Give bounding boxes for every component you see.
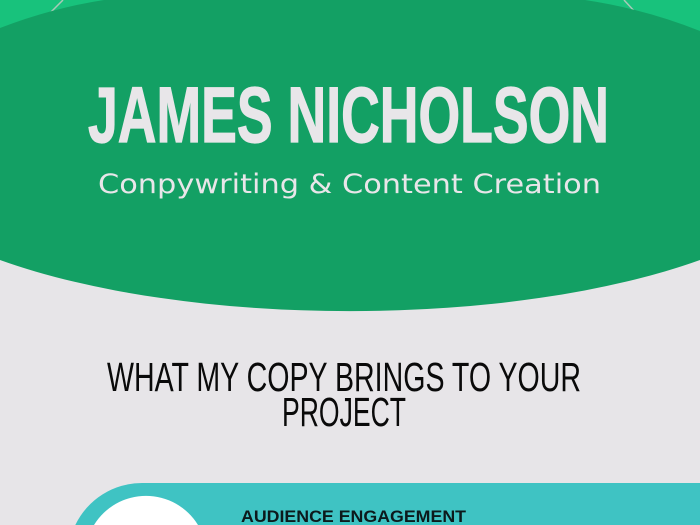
subtitle: Conpywriting & Content Creation <box>98 169 601 200</box>
section heading: PROJECT <box>282 389 406 435</box>
icon circle <box>94 496 198 525</box>
header green shape <box>0 0 700 311</box>
section heading <box>107 354 581 435</box>
panel: audience engagement <box>75 483 700 525</box>
top corner accents <box>0 0 700 50</box>
